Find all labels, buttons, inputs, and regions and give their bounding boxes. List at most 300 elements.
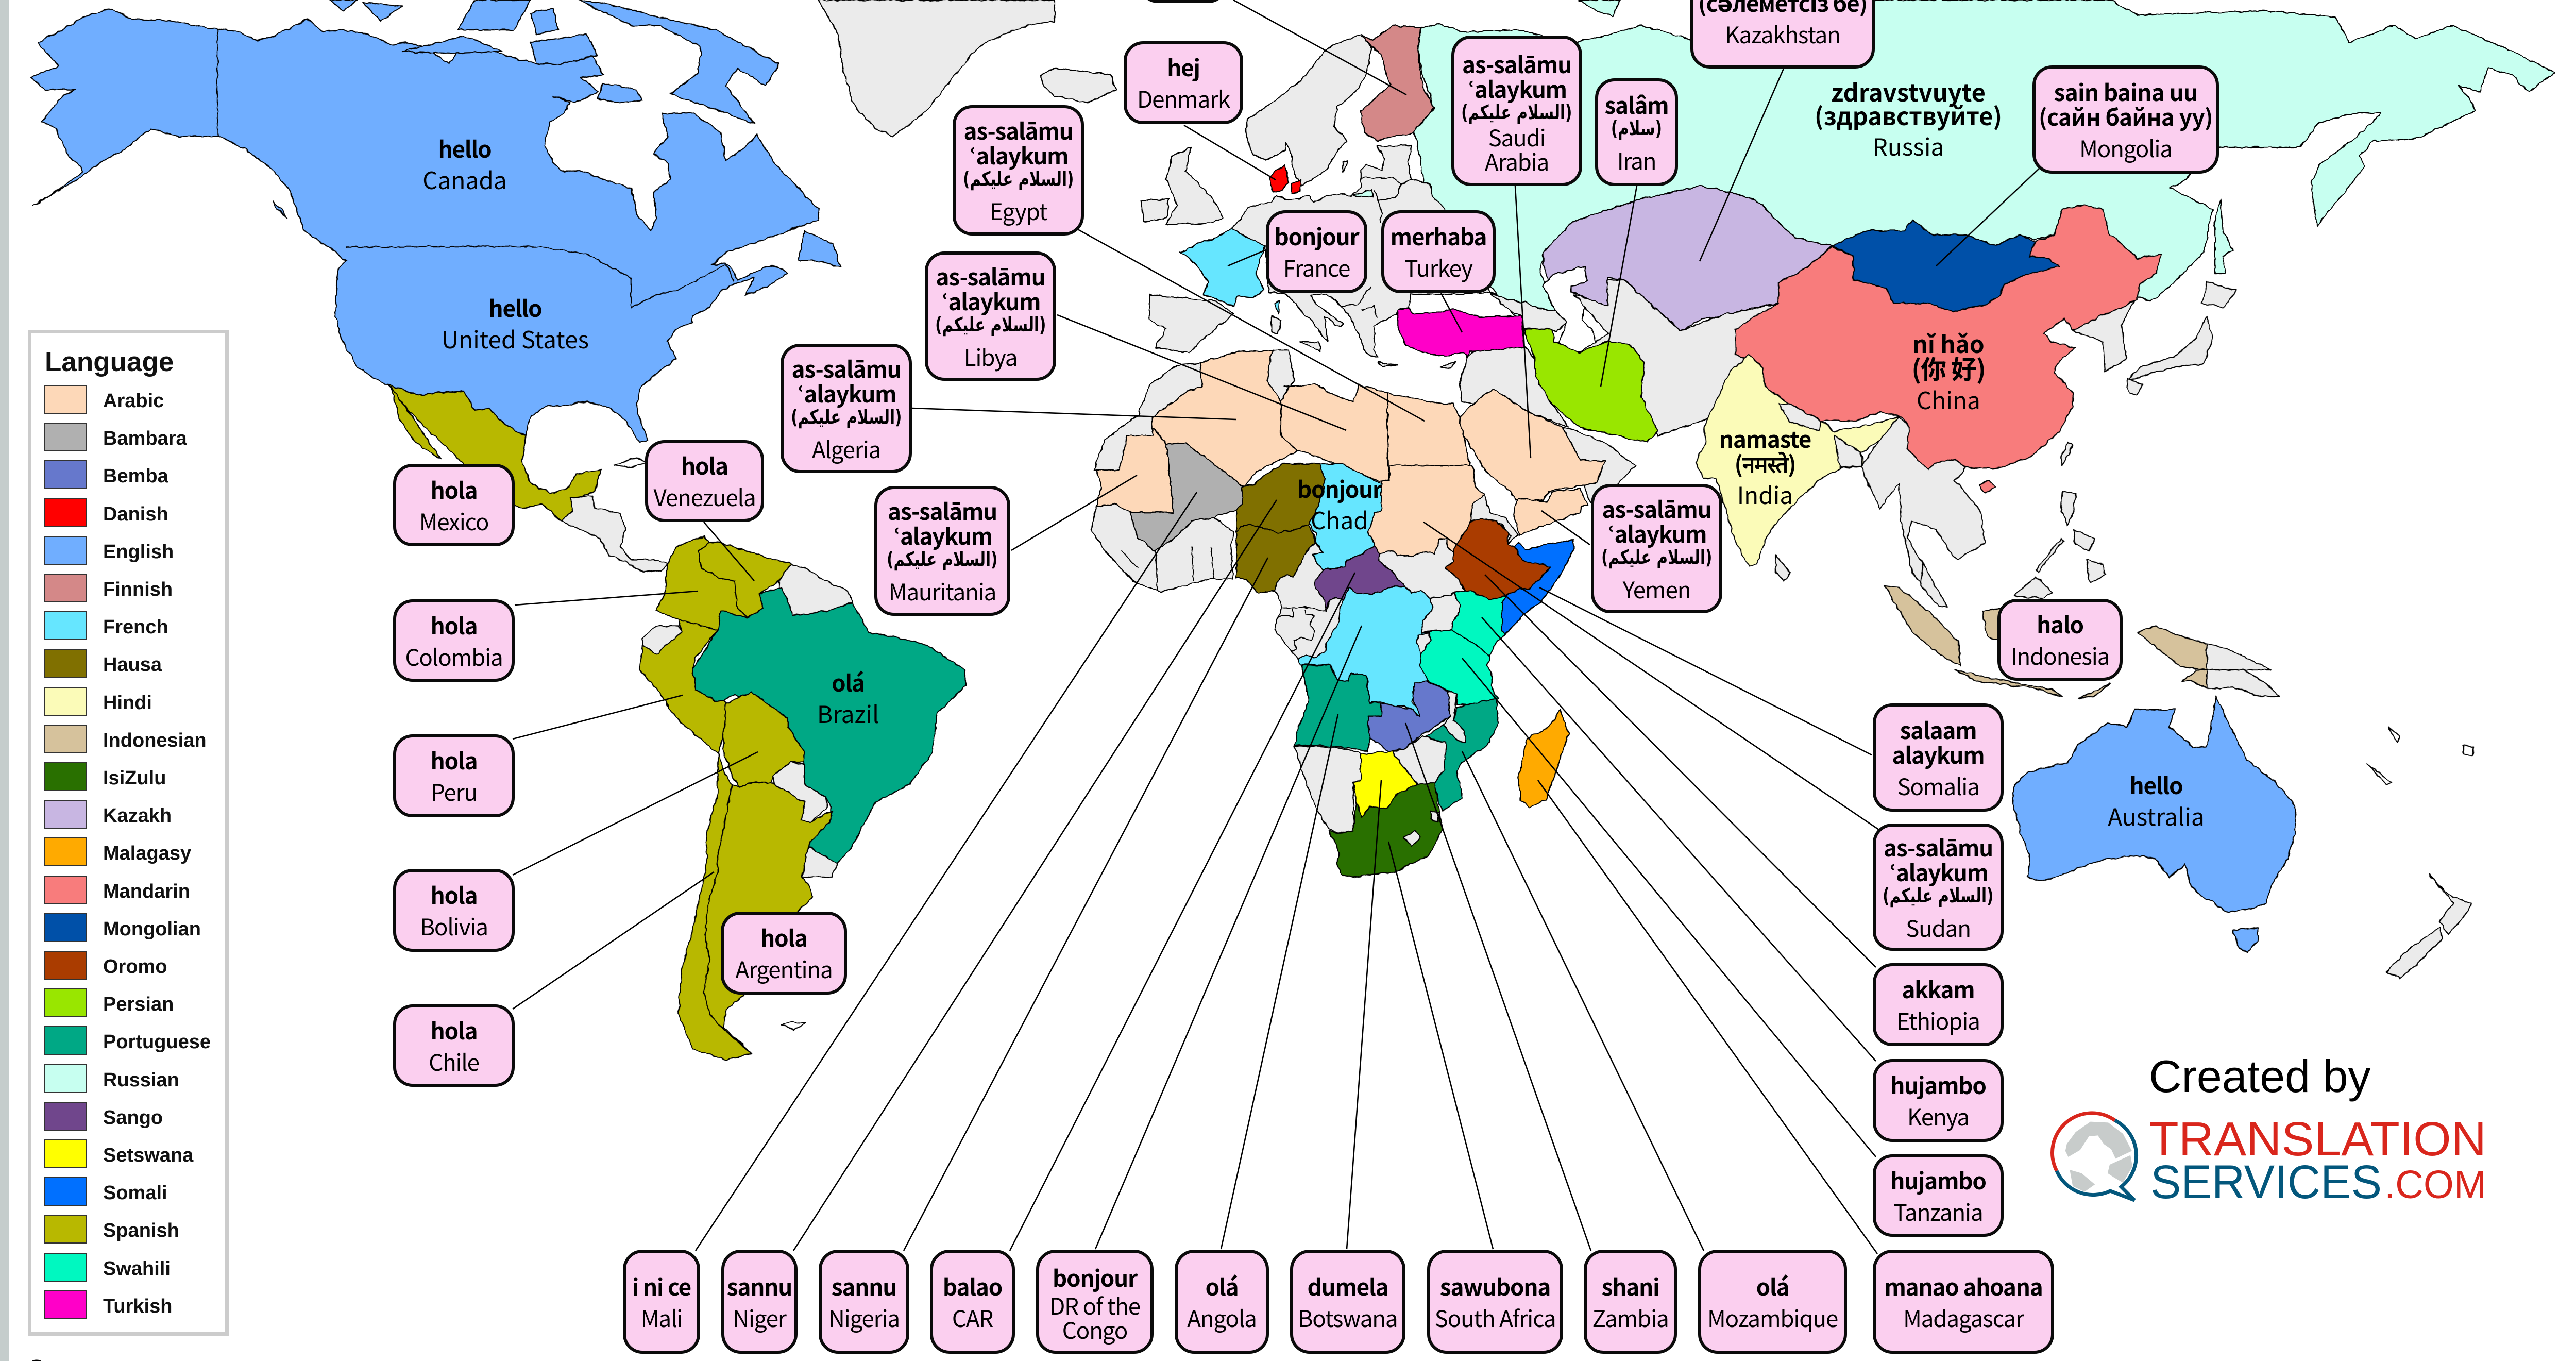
callout: Colombia: hola xyxy=(431,608,477,641)
leader: Peru xyxy=(513,695,683,739)
island: Sicily xyxy=(1300,342,1320,351)
legend row: Finnish: Finnish xyxy=(103,579,173,600)
callout: Nigeria: Nigeria xyxy=(828,1301,900,1334)
country: Sudan xyxy=(1367,465,1484,557)
map label: United States: United States xyxy=(442,322,589,356)
callout: Iran: (سلام) xyxy=(1611,116,1662,139)
region: Australasia xyxy=(1955,670,2473,978)
legend row: Malagasy xyxy=(45,838,191,866)
callout: Kazakhstan: Kazakhstan xyxy=(1725,17,1840,50)
legend row: Spanish xyxy=(45,1215,179,1243)
island: Malaysian Peninsula tip xyxy=(1920,564,1947,607)
country: Eswatini xyxy=(1431,811,1439,822)
region: Southern Africa xyxy=(1295,665,1568,877)
leader: Iran xyxy=(1601,186,1637,387)
callout: Mauritania: Mauritania xyxy=(889,574,996,607)
map label: United States xyxy=(442,291,589,356)
map label: Chad xyxy=(1297,472,1383,536)
map label: United States: hello xyxy=(488,291,542,324)
country: Bangladesh xyxy=(1835,436,1861,468)
region: Central and East Africa xyxy=(1236,464,1587,718)
countries: Cameroon, Gabon, Congo xyxy=(1275,543,1344,660)
callout: Egypt: as-salāmu xyxy=(964,113,1073,146)
callout: Egypt xyxy=(953,105,1084,236)
island: New Guinea, PNG part xyxy=(2207,643,2271,670)
legend row: Turkish: Turkish xyxy=(103,1296,172,1317)
callout: Sudan: ʿalaykum xyxy=(1888,854,1988,887)
callout: Somalia: salaam xyxy=(1900,712,1976,745)
island: Tasmania xyxy=(2232,928,2258,952)
callout: Libya: ʿalaykum xyxy=(941,283,1040,316)
legend row: IsiZulu: IsiZulu xyxy=(103,767,166,789)
map label: Australia xyxy=(2108,768,2205,833)
country: Namibia xyxy=(1295,746,1361,833)
map label: Canada: hello xyxy=(438,131,492,164)
leader: Yemen xyxy=(1541,511,1590,545)
country: Colombia xyxy=(656,536,749,630)
leader: Niger xyxy=(793,500,1277,1251)
country: Egypt xyxy=(1387,393,1471,466)
map label: Russia: zdravstvuyte xyxy=(1831,73,1986,109)
country: Yemen xyxy=(1514,489,1587,534)
callout: Indonesia xyxy=(1997,599,2123,681)
country: Nepal xyxy=(1778,404,1821,431)
map label: Australia: Australia xyxy=(2108,799,2205,833)
map label: Russia: Russia xyxy=(1873,129,1944,163)
logo wordmark xyxy=(2149,1112,2486,1208)
legend row: Arabic: Arabic xyxy=(103,390,164,412)
leader: Kenya xyxy=(1482,617,1876,1061)
country: Ireland xyxy=(1141,198,1169,222)
legend row: Indonesian xyxy=(45,725,207,753)
region: North America xyxy=(31,0,1055,864)
region: Caucasus xyxy=(1490,292,1566,332)
callout: South Africa: sawubona xyxy=(1440,1269,1550,1302)
country: Malawi xyxy=(1443,691,1465,743)
callout: Colombia: Colombia xyxy=(405,639,503,672)
islands: Solomon xyxy=(2389,727,2400,743)
callout: Mauritania: as-salāmu xyxy=(888,494,997,527)
country: Russia xyxy=(1412,0,2555,325)
callout: Tanzania: hujambo xyxy=(1890,1163,1986,1196)
callout: France xyxy=(1266,210,1367,293)
map label: China: China xyxy=(1917,382,1980,416)
leader: Somalia xyxy=(1539,587,1872,755)
callout: Madagascar xyxy=(1873,1250,2054,1354)
island: Timor xyxy=(2079,683,2110,699)
legend title: Language xyxy=(45,347,174,377)
island: Gotland xyxy=(1342,161,1348,172)
country: Central African Republic xyxy=(1315,545,1404,608)
island: Mindanao xyxy=(2087,560,2105,583)
country: Paraguay xyxy=(774,763,827,822)
islands: Canadian Arctic xyxy=(274,0,841,267)
leader: Finland xyxy=(1233,0,1406,95)
map label: Brazil: Brazil xyxy=(817,696,879,730)
legend row: Mongolian xyxy=(45,914,201,942)
country: Turkey xyxy=(1398,308,1524,357)
callout: Mozambique xyxy=(1698,1250,1847,1354)
callout: Saudi Arabia xyxy=(1451,36,1582,186)
map label: Canada xyxy=(422,131,507,196)
callout: Egypt: (السلام عليكم) xyxy=(963,167,1074,190)
leader: South Africa xyxy=(1388,842,1493,1249)
callout: Algeria xyxy=(781,344,912,473)
callout: Algeria: as-salāmu xyxy=(792,351,901,384)
country: Botswana xyxy=(1353,751,1418,817)
callout: Mozambique: olá xyxy=(1756,1269,1789,1302)
map label: Chad: Chad xyxy=(1311,502,1368,536)
callout: Yemen: Yemen xyxy=(1623,572,1690,605)
callout: Saudi Arabia: ʿalaykum xyxy=(1467,72,1567,105)
leader: Zambia xyxy=(1405,723,1591,1251)
legend row: IsiZulu xyxy=(45,763,166,791)
country: Bolivia xyxy=(723,692,804,787)
legend row: Setswana: Setswana xyxy=(103,1145,194,1166)
callout: Mongolia: Mongolia xyxy=(2079,131,2172,164)
island: Hokkaido xyxy=(2201,282,2236,308)
border: Alaska and Canada xyxy=(217,29,218,137)
callout: Peru: Peru xyxy=(431,775,477,808)
callout: Mongolia: (сайн байна уу) xyxy=(2039,99,2213,132)
island: New Zealand south xyxy=(2386,928,2443,978)
island: Palawan xyxy=(2036,539,2063,573)
island: Iceland xyxy=(1041,69,1116,103)
map label: China: (你 好) xyxy=(1911,349,1986,387)
legend row: Hindi: Hindi xyxy=(103,692,152,714)
logo wordmark: .COM xyxy=(2384,1163,2486,1207)
leader: Algeria xyxy=(912,408,1236,419)
island: Cuba xyxy=(615,457,648,468)
callout: Bolivia xyxy=(393,869,515,952)
country: Mauritania xyxy=(1096,427,1174,513)
legend row: Somali: Somali xyxy=(103,1182,167,1204)
legend row: Persian: Persian xyxy=(103,994,174,1015)
leader: Kazakhstan xyxy=(1700,69,1784,261)
country: South Africa xyxy=(1329,784,1443,877)
country: Madagascar xyxy=(1518,710,1568,808)
map label: India: India xyxy=(1737,477,1793,511)
callout: Libya: as-salāmu xyxy=(936,259,1045,292)
callout: Kenya xyxy=(1873,1059,2004,1142)
callout: Venezuela: Venezuela xyxy=(653,480,756,513)
callout: Mexico xyxy=(393,464,515,546)
countries: Rwanda and Burundi xyxy=(1417,633,1431,654)
leader: Mozambique xyxy=(1462,751,1704,1251)
leader: Venezuela xyxy=(704,522,754,581)
callout: France: bonjour xyxy=(1275,219,1359,252)
callout: Zambia: shani xyxy=(1602,1269,1659,1302)
logo wordmark: TRANSLATION xyxy=(2149,1112,2486,1166)
callout: Peru xyxy=(393,734,515,817)
countries: Canada and United States xyxy=(31,9,820,442)
callout: Chile xyxy=(393,1004,515,1087)
callout: Denmark: hej xyxy=(1167,50,1200,83)
callout: Zambia xyxy=(1584,1250,1677,1354)
country: Mexico xyxy=(388,384,601,521)
countries: Central Asia and Pakistan xyxy=(1574,280,1792,436)
legend row: Swahili: Swahili xyxy=(103,1258,171,1280)
callout: Ethiopia xyxy=(1873,963,2004,1046)
country: China xyxy=(1735,205,2161,470)
country: Lesotho xyxy=(1404,831,1420,846)
leader: Chile xyxy=(513,872,714,1009)
countries: mainland Southeast Asia xyxy=(1861,416,1985,607)
island: Luzon xyxy=(2061,491,2076,526)
leader: Madagascar xyxy=(1538,780,1877,1254)
country: Mozambique xyxy=(1426,699,1499,811)
island: Crete xyxy=(1378,362,1398,366)
callout: Somalia: alaykum xyxy=(1892,737,1984,770)
callout: Mauritania xyxy=(874,486,1010,616)
island: Borneo, Malaysian part xyxy=(2014,577,2052,598)
legend row: Kazakh: Kazakh xyxy=(103,805,172,827)
leader: Bolivia xyxy=(513,752,758,875)
country: Iran xyxy=(1524,329,1658,442)
region: Kaliningrad xyxy=(1353,190,1373,197)
country: Uruguay xyxy=(802,844,838,877)
callout: Saudi Arabia: Arabia xyxy=(1485,144,1549,177)
map label: Australia: hello xyxy=(2130,768,2182,801)
callout: Somalia xyxy=(1873,703,2004,812)
callout: Mali xyxy=(623,1250,700,1354)
map label: Canada: Canada xyxy=(422,162,507,196)
island: Cyprus xyxy=(1440,361,1456,368)
countries: Syria, Iraq, Jordan xyxy=(1460,346,1568,427)
island: New Zealand north xyxy=(2429,875,2472,934)
legend row: Bambara: Bambara xyxy=(103,428,187,449)
island: New Guinea south, Indonesian part xyxy=(2183,670,2207,688)
callout: Madagascar: manao ahoana xyxy=(1884,1269,2043,1302)
country: France xyxy=(1180,229,1265,306)
callout: Peru: hola xyxy=(431,743,477,776)
callout: Mongolia: sain baina uu xyxy=(2054,74,2197,107)
legend row: Mandarin: Mandarin xyxy=(103,881,190,902)
leader: Denmark xyxy=(1184,125,1276,180)
countries: West Africa xyxy=(1091,504,1233,592)
legend row: Sango: Sango xyxy=(103,1107,163,1129)
island: Sri Lanka xyxy=(1776,556,1790,581)
legend row: Oromo xyxy=(45,951,167,979)
legend row: Somali xyxy=(45,1178,167,1205)
legend row: Mongolian: Mongolian xyxy=(103,918,201,940)
legend row: Finnish xyxy=(45,574,173,602)
island: Hainan xyxy=(1979,481,1995,493)
map label: India: (नमस्ते) xyxy=(1734,446,1796,479)
callout: Colombia xyxy=(393,599,515,682)
islands: Fiji xyxy=(2464,745,2473,756)
callout: Egypt: Egypt xyxy=(990,194,1047,227)
peninsula: Baja California xyxy=(391,387,442,459)
callout: Bolivia: Bolivia xyxy=(420,909,488,942)
callout: Niger: Niger xyxy=(733,1301,786,1334)
island: Sumatra xyxy=(1885,585,1960,666)
callout: DR of the Congo: Congo xyxy=(1062,1313,1127,1346)
legend row: Russian: Russian xyxy=(103,1069,179,1091)
legend row: Russian xyxy=(45,1065,179,1093)
map label: Brazil xyxy=(817,665,879,730)
sea: Caspian xyxy=(1543,266,1597,352)
border: Canada and United States xyxy=(346,247,735,308)
legend row: Arabic xyxy=(45,385,164,413)
island: Taiwan xyxy=(2061,442,2073,466)
callout: Mali: i ni ce xyxy=(632,1269,691,1302)
page side strip: left xyxy=(0,0,9,1361)
leader: Mauritania xyxy=(1011,475,1137,550)
callout: Ethiopia: akkam xyxy=(1902,972,1975,1005)
legend row: Bemba: Bemba xyxy=(103,465,169,487)
country: Peru xyxy=(639,619,726,753)
countries: Korea xyxy=(2073,301,2134,372)
island: Java xyxy=(1955,670,2062,696)
legend row: Sango xyxy=(45,1102,163,1130)
callout: CAR xyxy=(930,1250,1015,1354)
callout: Kazakhstan xyxy=(1690,0,1875,69)
country: Zimbabwe xyxy=(1393,736,1446,784)
callout: Argentina xyxy=(721,912,847,995)
callout: Mozambique: Mozambique xyxy=(1707,1301,1838,1334)
map label: Brazil: olá xyxy=(832,665,865,698)
callout: Saudi Arabia: (السلام عليكم) xyxy=(1461,101,1572,124)
map label: Chad: bonjour xyxy=(1297,472,1382,505)
callout: Madagascar: Madagascar xyxy=(1903,1301,2024,1334)
island: New Guinea south, PNG part xyxy=(2207,670,2279,696)
countries: Spain and Portugal xyxy=(1149,295,1233,352)
country: Denmark, Zealand xyxy=(1292,180,1300,194)
callout: Kenya: hujambo xyxy=(1890,1068,1986,1101)
legend row: Portuguese: Portuguese xyxy=(103,1031,211,1053)
leader: Ethiopia xyxy=(1485,575,1876,967)
legend row: Danish xyxy=(45,499,168,527)
island: Greenland xyxy=(818,0,1055,137)
islands: Falklands xyxy=(781,1021,805,1030)
countries: Central America xyxy=(562,496,668,573)
leader: Colombia xyxy=(515,591,698,605)
countries: Oman and UAE xyxy=(1563,427,1636,504)
callout: Denmark: Denmark xyxy=(1137,81,1230,114)
callout: Chile: hola xyxy=(431,1013,477,1046)
callout: Venezuela: hola xyxy=(681,448,728,481)
legend row: French xyxy=(45,612,168,640)
callout: Zambia: Zambia xyxy=(1592,1301,1669,1334)
map label: India: namaste xyxy=(1719,422,1811,455)
callout: Iran: Iran xyxy=(1617,143,1656,176)
leader: Mongolia xyxy=(1936,169,2039,266)
logo globe icon xyxy=(2053,1113,2137,1200)
callout: Turkey xyxy=(1381,210,1496,293)
callout: Mexico: Mexico xyxy=(419,504,488,537)
country: Australia xyxy=(2012,696,2295,912)
callout: Turkey: Turkey xyxy=(1404,250,1472,283)
leader: France xyxy=(1228,250,1266,266)
country: Chad xyxy=(1308,464,1381,570)
callout: CAR: CAR xyxy=(952,1301,993,1334)
leader: CAR xyxy=(1010,573,1355,1251)
leader: Botswana xyxy=(1347,780,1381,1249)
islands: Visayas xyxy=(2073,530,2094,551)
callout: Denmark xyxy=(1124,41,1243,124)
callout: South Africa xyxy=(1427,1250,1563,1354)
callout: Libya: (السلام عليكم) xyxy=(935,313,1046,336)
country: Algeria xyxy=(1153,350,1298,487)
callout: Mauritania: (السلام عليكم) xyxy=(887,548,998,570)
legend row: English xyxy=(45,536,174,564)
callout: Argentina: hola xyxy=(760,920,807,953)
island: New Guinea, Indonesian part xyxy=(2137,626,2207,670)
island: Borneo, Indonesian part xyxy=(1982,609,2001,641)
legend row: Oromo: Oromo xyxy=(103,956,167,978)
legend row: Swahili xyxy=(45,1253,171,1281)
callout: Sudan: Sudan xyxy=(1906,910,1971,943)
country: Finland xyxy=(1361,26,1435,140)
legend row: English: English xyxy=(103,541,174,563)
country: Tanzania xyxy=(1420,630,1498,706)
leader: Tanzania xyxy=(1462,658,1876,1157)
callout: Yemen: as-salāmu xyxy=(1602,492,1711,525)
callout: Yemen: ʿalaykum xyxy=(1607,516,1706,549)
legend row: Danish: Danish xyxy=(103,503,168,525)
callout: Kenya: Kenya xyxy=(1907,1099,1969,1132)
island: Honshu xyxy=(2127,316,2212,380)
country: Eritrea xyxy=(1470,495,1518,545)
country: Brazil xyxy=(692,587,965,864)
callout: Angola: olá xyxy=(1206,1269,1238,1302)
callout: Sudan xyxy=(1873,824,2004,951)
region: mainland Europe and Turkey xyxy=(1180,26,1566,368)
callout: Niger: sannu xyxy=(727,1269,792,1302)
legend row: Turkish xyxy=(45,1291,172,1319)
callout: Yemen xyxy=(1591,484,1722,613)
callout: Bolivia: hola xyxy=(431,878,477,911)
country: Kenya xyxy=(1451,591,1505,656)
legend row: Hausa xyxy=(45,649,162,677)
callout: Tanzania: Tanzania xyxy=(1893,1195,1983,1228)
island: Kyushu xyxy=(2127,378,2143,395)
leader: Egypt xyxy=(1077,229,1425,421)
country: Ecuador xyxy=(642,626,682,653)
legend row: Portuguese xyxy=(45,1027,211,1054)
leader lines xyxy=(513,0,2039,1254)
country: South Sudan xyxy=(1379,537,1465,598)
callout: Angola xyxy=(1175,1250,1269,1354)
legend row: Malagasy: Malagasy xyxy=(103,843,191,864)
callout: DR of the Congo: bonjour xyxy=(1053,1261,1137,1293)
callout: Tanzania xyxy=(1873,1154,2004,1237)
island: New Caledonia xyxy=(2367,765,2392,784)
country: India xyxy=(1696,355,1899,566)
callout: Argentina: Argentina xyxy=(735,952,833,985)
country: United Kingdom xyxy=(1166,147,1223,224)
legend row: Mandarin xyxy=(45,876,190,904)
callout: DR of the Congo xyxy=(1036,1250,1154,1354)
map label: China xyxy=(1911,326,1986,416)
legend row: Spanish: Spanish xyxy=(103,1220,179,1241)
legend row: Bemba xyxy=(45,461,169,489)
leader: Nigeria xyxy=(904,558,1268,1251)
legend row: Bambara xyxy=(45,423,187,451)
country: Saudi Arabia xyxy=(1457,389,1605,500)
country: Niger xyxy=(1236,464,1325,532)
legend row: Kazakh xyxy=(45,800,172,828)
leader: Mali xyxy=(696,492,1197,1251)
callout: Algeria: (السلام عليكم) xyxy=(791,405,902,428)
island: Sakhalin xyxy=(2215,198,2232,274)
callout: France: France xyxy=(1283,250,1350,283)
callout: Yemen: (السلام عليكم) xyxy=(1601,545,1712,568)
country: Mali xyxy=(1127,444,1245,551)
country: Libya xyxy=(1281,384,1388,482)
callout: Chile: Chile xyxy=(429,1044,479,1077)
